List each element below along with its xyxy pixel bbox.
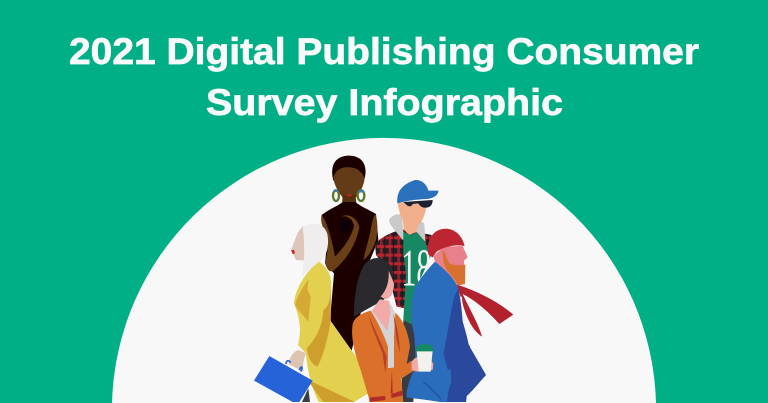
illustration: group of five people [254,156,513,402]
figure: woman in black dress [321,156,378,351]
figure: man in cap and plaid jacket [375,180,438,402]
figure: woman with dark hair and orange blazer [352,258,415,402]
title: Survey Infographic [206,81,563,123]
white semicircle panel [112,138,656,403]
text: jersey number: 18 [401,240,431,298]
figure: woman with white hair and yellow coat [254,224,378,402]
title: 2021 Digital Publishing Consumer [69,30,699,72]
figure: bearded man with bandana and blue jacket [407,229,513,402]
icon: blue handbag [254,356,313,402]
icon: hoop earrings [333,190,364,201]
title [69,30,699,123]
icon: coffee cup in hand [412,344,434,372]
